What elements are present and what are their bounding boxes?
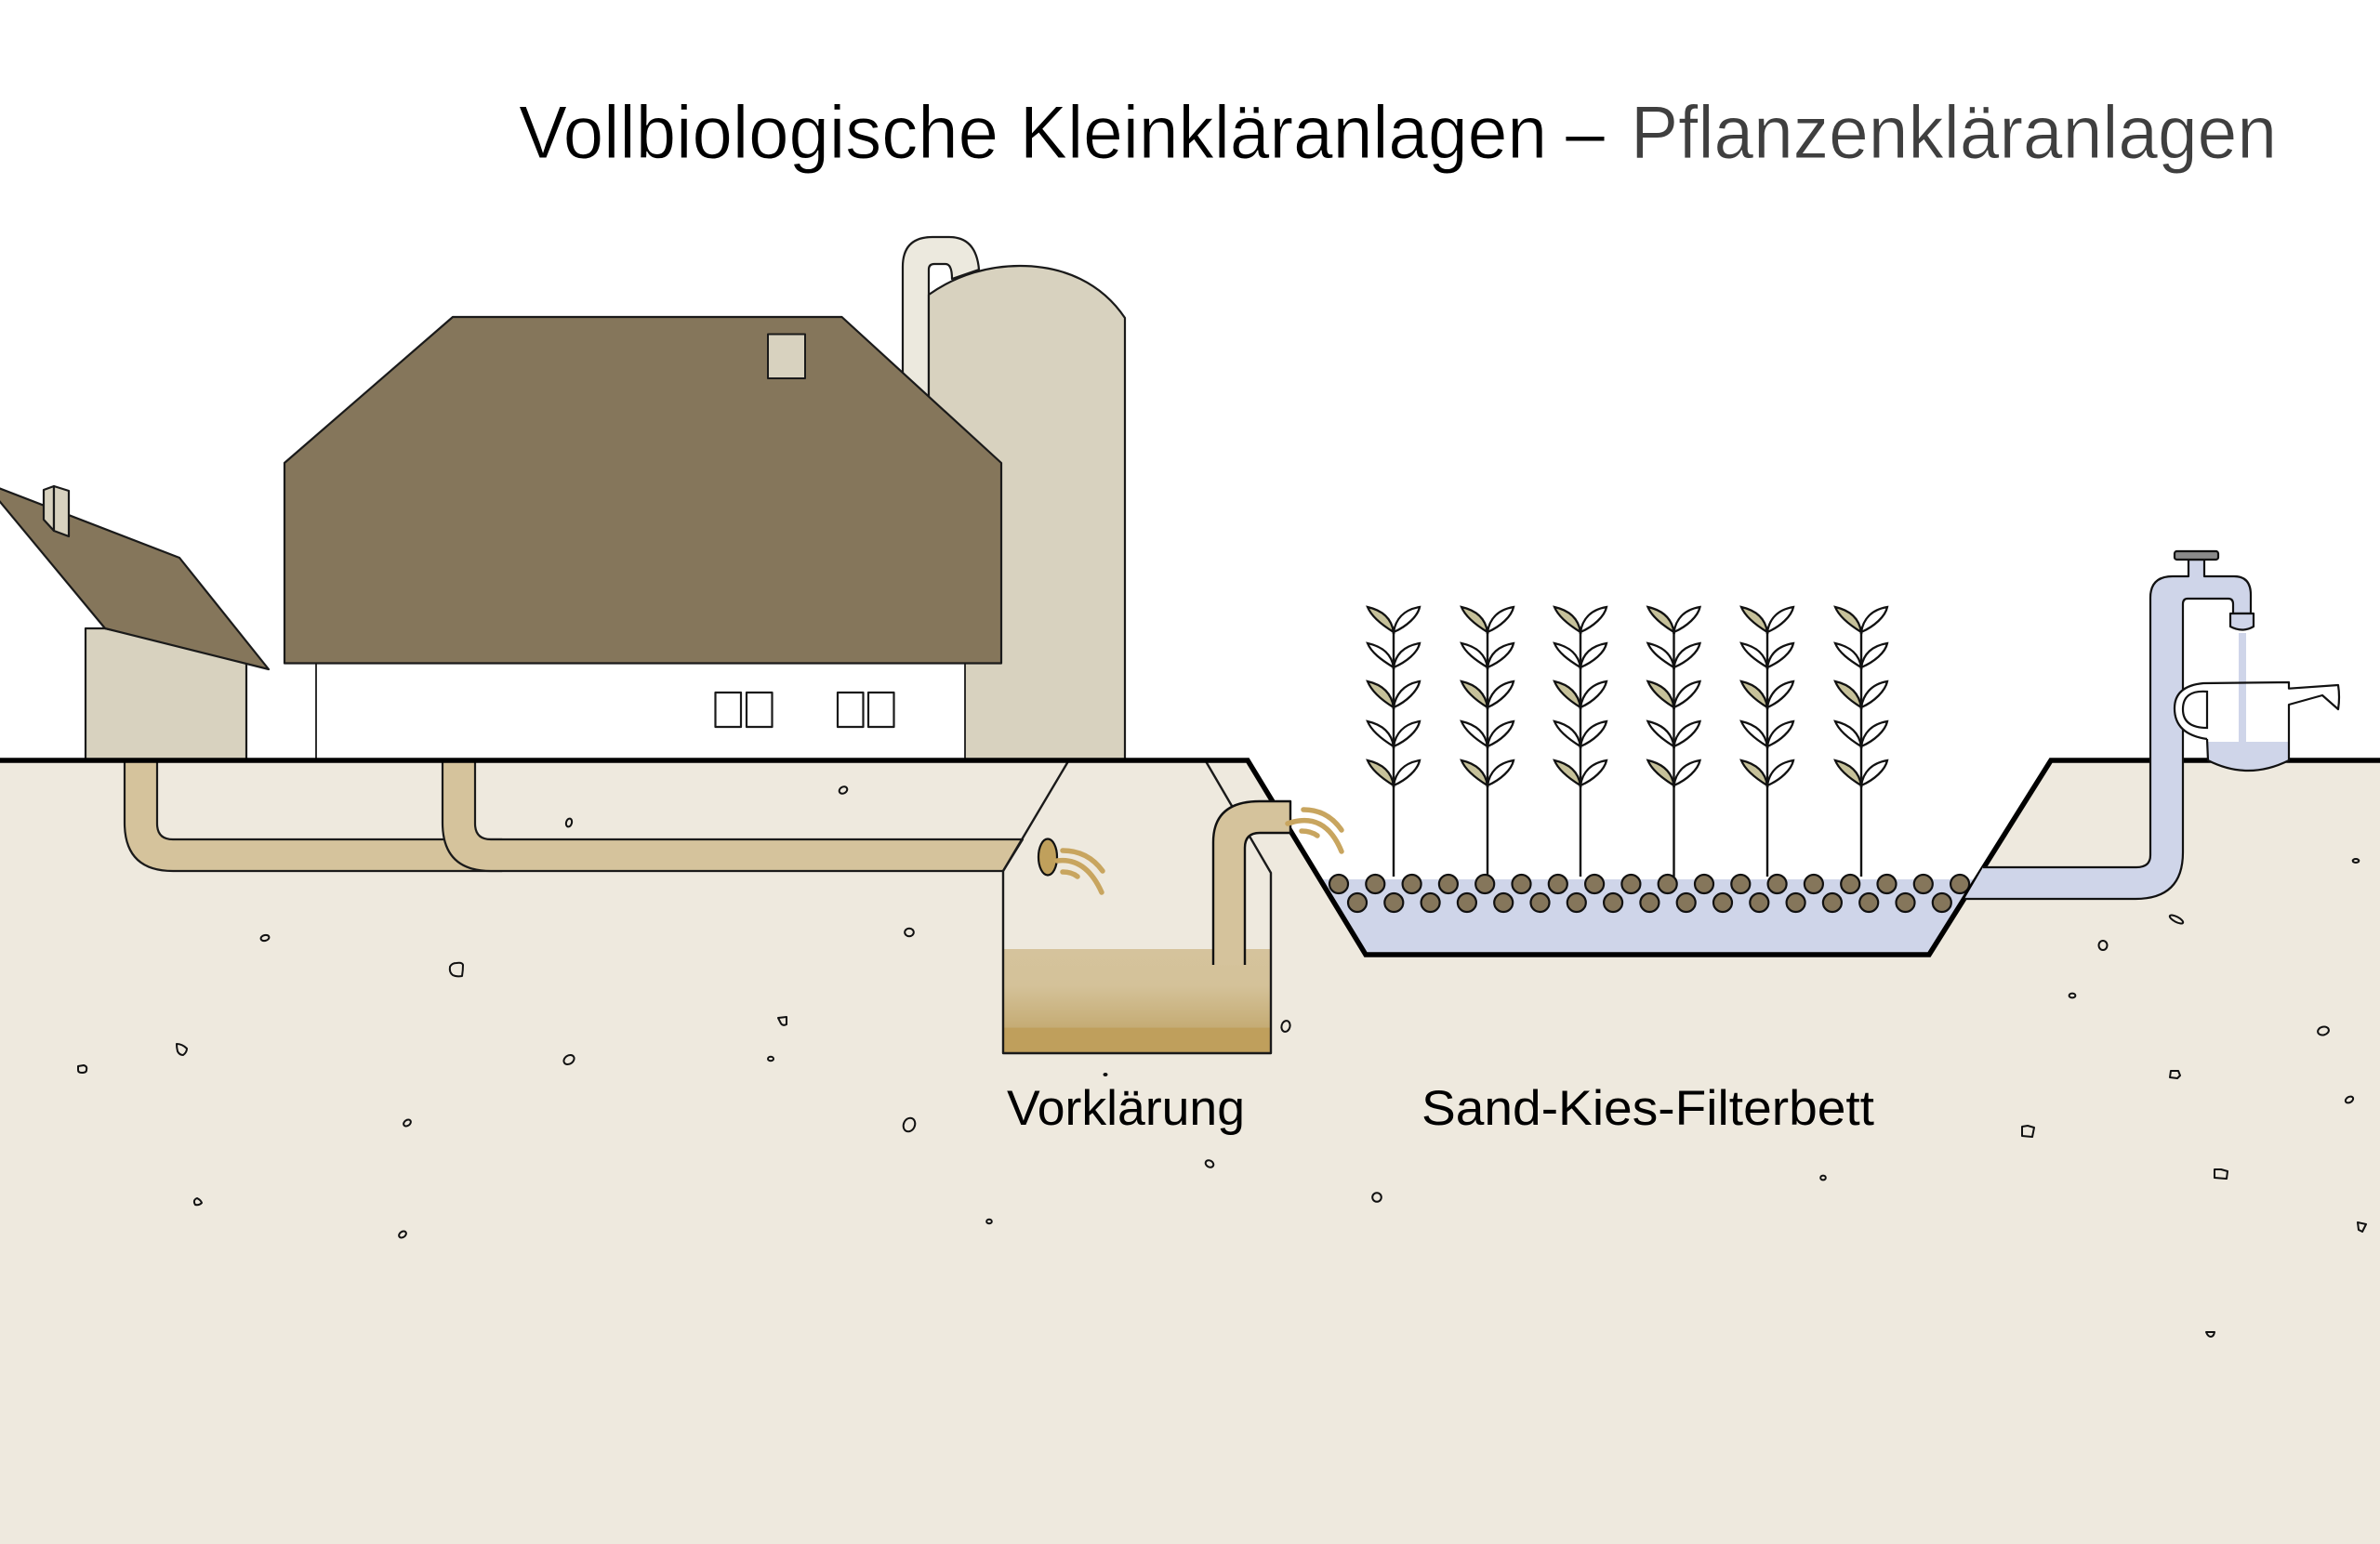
main farmhouse [284, 317, 1001, 760]
farmhouse roof [284, 317, 1001, 664]
plant 2 [1461, 607, 1514, 877]
tap with outflow pipe [1964, 551, 2254, 899]
label: Sand-Kies-Filterbett: Sand-Kies-Filterbett [1421, 1081, 1874, 1136]
silo body [929, 266, 1125, 760]
inlet opening [1038, 838, 1057, 876]
watering can [2175, 633, 2339, 771]
pipe from small house [125, 762, 502, 871]
label: Vorklärung: Vorklärung [1007, 1081, 1245, 1136]
silo vent pipe [903, 237, 979, 437]
pipe from farmhouse [443, 762, 1023, 871]
farmhouse white wall [316, 663, 965, 760]
inlet water arcs [1057, 851, 1103, 892]
can white body [2175, 682, 2339, 771]
ground surface line [0, 760, 2380, 955]
septic tank Vorklärung [1003, 761, 1271, 1053]
small house chimney [44, 486, 69, 536]
plant 3 [1554, 607, 1606, 877]
farmhouse windows [716, 693, 894, 727]
small house wall [86, 628, 246, 760]
water stream [2239, 633, 2246, 742]
filter gravel pebbles [1329, 875, 1969, 912]
outflow pipe and tap body [1964, 560, 2251, 899]
can handle opening [2183, 692, 2207, 728]
tap nozzle [2230, 614, 2254, 630]
sludge layer [1003, 949, 1271, 1053]
roof skylight [768, 335, 805, 378]
title [519, 91, 2277, 175]
plant 5 [1741, 607, 1793, 877]
tank outline [1003, 761, 1271, 1053]
title: – [1566, 91, 1606, 175]
small house roof [0, 487, 269, 669]
title: Vollbiologische [519, 91, 998, 175]
plant 1 [1368, 607, 1420, 877]
title: Kleinkläranlagen [1020, 91, 1547, 175]
outlet water arcs [1288, 810, 1342, 851]
planted filter bed water [1320, 879, 1977, 955]
ground soil [0, 760, 2380, 1544]
water in can [2208, 742, 2289, 771]
plant 4 [1647, 607, 1699, 877]
can outline [2175, 682, 2339, 771]
plant 6 [1835, 607, 1887, 877]
inlet pipes [125, 762, 1023, 871]
tank outlet pipe [1213, 801, 1290, 965]
title: Pflanzenkläranlagen [1631, 91, 2277, 175]
tap handle [2175, 551, 2218, 560]
silo with vent pipe [903, 237, 1125, 760]
soil stones [78, 785, 2366, 1337]
small house [0, 486, 269, 760]
